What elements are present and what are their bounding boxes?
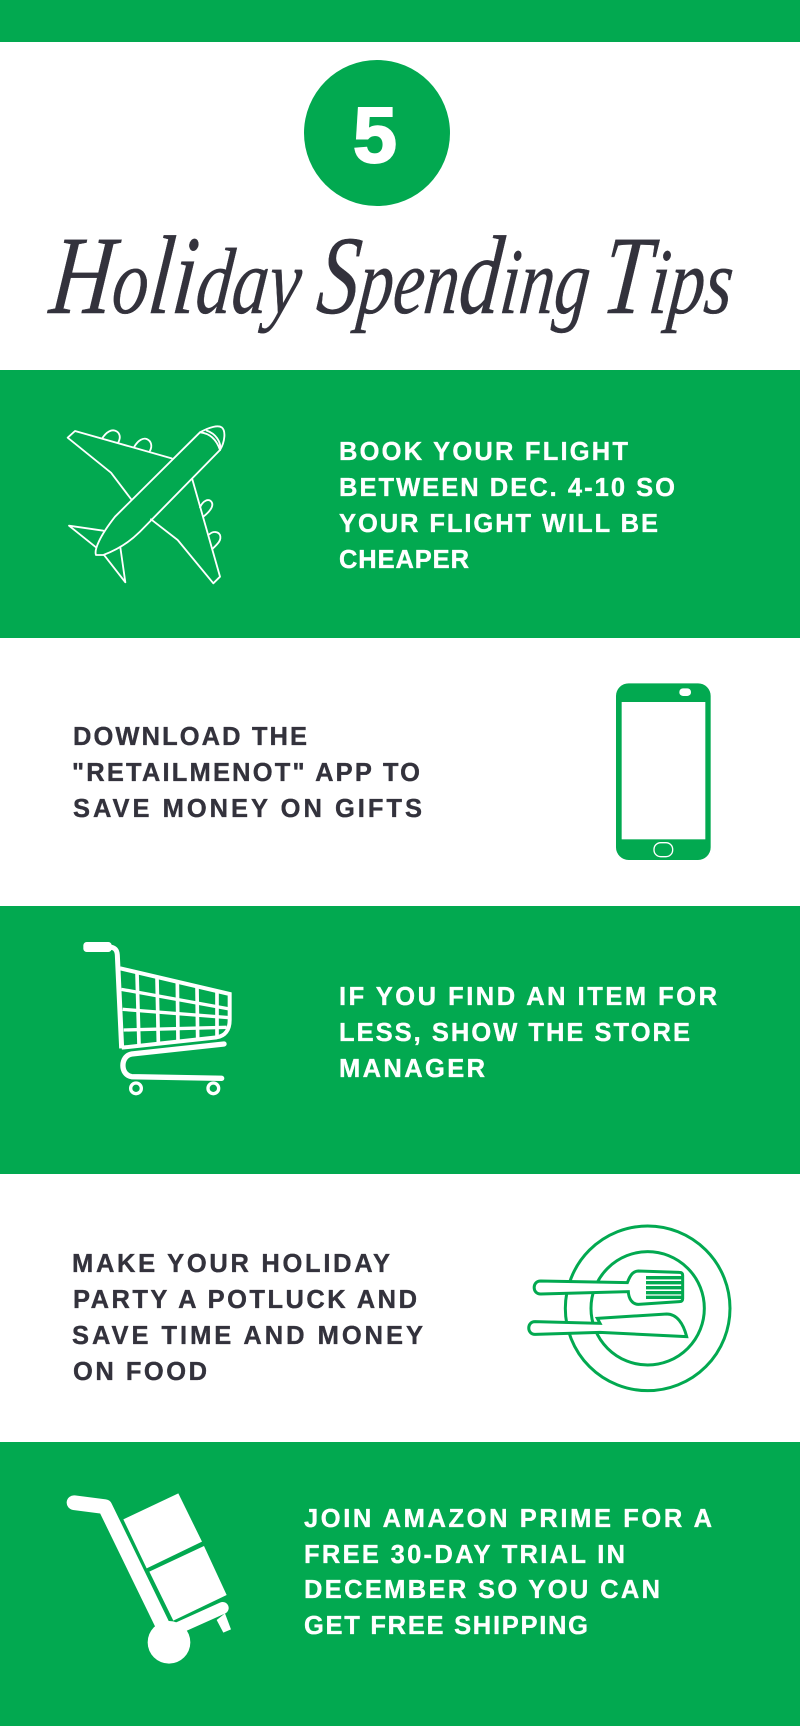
tip text: FREE 30-DAY TRIAL IN <box>304 1541 625 1569</box>
tip text: LESS, SHOW THE STORE <box>339 1019 690 1047</box>
icon: plate and cutlery <box>529 1226 730 1391</box>
tip text <box>72 723 422 823</box>
panel: app tip <box>72 683 711 860</box>
tip text: SAVE TIME AND MONEY <box>72 1322 423 1350</box>
tip text: BOOK YOUR FLIGHT <box>339 438 628 466</box>
number badge: 5 <box>353 90 397 179</box>
panel: amazon prime tip <box>0 1442 800 1726</box>
icon: airplane <box>68 426 224 583</box>
top band <box>0 0 800 42</box>
panel: price match tip <box>0 906 800 1174</box>
title <box>44 214 740 338</box>
tip text: DOWNLOAD THE <box>73 723 307 751</box>
tip text: PARTY A POTLUCK AND <box>73 1286 417 1314</box>
tip text: SAVE MONEY ON GIFTS <box>73 795 422 823</box>
tip text: JOIN AMAZON PRIME FOR A <box>304 1505 712 1533</box>
icon: smartphone <box>616 683 711 860</box>
panel: flight tip <box>0 370 800 638</box>
tip text: DECEMBER SO YOU CAN <box>304 1576 660 1604</box>
tip text <box>339 983 717 1083</box>
title: Spending <box>312 214 597 338</box>
tip text: ON FOOD <box>73 1358 207 1386</box>
tip text: YOUR FLIGHT WILL BE <box>339 510 658 538</box>
panel: potluck tip <box>72 1226 730 1391</box>
title: Tips <box>597 214 740 338</box>
header <box>44 60 740 338</box>
tip text: MANAGER <box>339 1055 485 1083</box>
tip text: "RETAILMENOT" APP TO <box>72 759 420 787</box>
icon: hand truck with boxes <box>74 1493 231 1664</box>
icon: shopping cart <box>83 942 230 1094</box>
number badge <box>304 60 450 206</box>
tip text: IF YOU FIND AN ITEM FOR <box>339 983 717 1011</box>
tip text: BETWEEN DEC. 4-10 SO <box>339 474 675 502</box>
title: Holiday <box>44 214 308 338</box>
tip text <box>72 1250 423 1386</box>
tip text <box>304 1505 712 1640</box>
tip text: MAKE YOUR HOLIDAY <box>72 1250 390 1278</box>
tip text <box>339 438 675 574</box>
tip text: GET FREE SHIPPING <box>304 1612 588 1640</box>
tip text: CHEAPER <box>339 546 469 574</box>
